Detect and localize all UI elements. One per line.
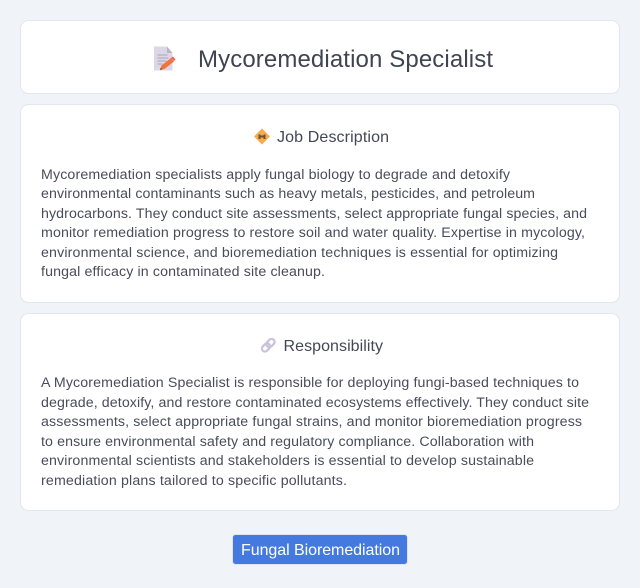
text block: responsibility: A Mycoremediation Specialist is responsible for deploying fungi-based techniques to (41, 375, 579, 391)
icon: chain link (261, 338, 276, 353)
text block: job description: environmental contaminants such as heavy metals, pesticides, and petroleum (41, 186, 535, 202)
text block: responsibility: to ensure environmental safety and regulatory compliance. Collaboration with (41, 434, 534, 450)
tag button: fungal bioremediation: Fungal Bioremediation (241, 542, 400, 559)
panel: job description (20, 104, 620, 302)
panel: responsibility (20, 314, 620, 510)
text block: job description: environmental science, and bioremediation techniques is essential for optimizing (41, 245, 558, 261)
panel: title card (20, 20, 620, 94)
title: Mycoremediation Specialist (198, 46, 493, 73)
text block: responsibility: remediation plans tailored to specific pollutants. (41, 473, 347, 489)
text block: responsibility: degrade, detoxify, and restore contaminated ecosystems effectively. They conduct site (41, 395, 589, 411)
text block: job description: hydrocarbons. They conduct site assessments, select appropriate fungal species, and (41, 206, 587, 222)
tag button: fungal bioremediation (232, 534, 408, 564)
icon: document with pencil (154, 46, 176, 70)
text block: job description: fungal efficacy in contaminated site cleanup. (41, 264, 325, 280)
text block: job description: monitor remediation progress to restore soil and water quality. Expertise in mycology, (41, 225, 585, 241)
heading: job description: Job Description (277, 129, 389, 146)
heading: responsibility: Responsibility (284, 338, 383, 355)
icon: orange diamond (254, 128, 270, 144)
text block: job description: Mycoremediation specialists apply fungal biology to degrade and detoxify (41, 167, 511, 183)
text block: responsibility: assessments, select appropriate fungal strains, and monitor bioremediation progress (41, 414, 582, 430)
text block: job description (41, 167, 587, 280)
text block: responsibility: environmental scientists and stakeholders is essential to develop sustainable (41, 453, 534, 469)
text block: responsibility (41, 375, 589, 489)
